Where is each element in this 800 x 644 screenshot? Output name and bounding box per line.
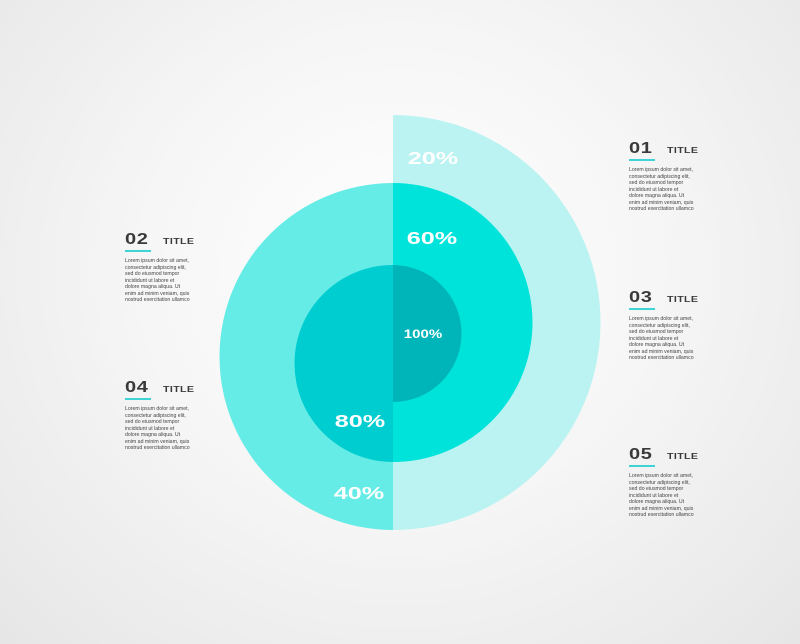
segment: 40% left: 40%: [334, 483, 384, 503]
text block 01: [629, 140, 698, 212]
text block 04: consectetur adipiscing elit,: [125, 412, 186, 418]
text block 03: enim ad minim veniam, quis: [629, 348, 693, 354]
text block 05: sed do eiusmod tempor: [629, 486, 683, 492]
text block 03: [629, 289, 698, 361]
text block 05: [629, 446, 698, 518]
text block 05: Lorem ipsum dolor sit amet,: [629, 473, 693, 479]
segment: 20% right outer: 20%: [408, 148, 458, 168]
segment: 60% right: [393, 183, 532, 462]
text block 01: TITLE: [667, 145, 698, 155]
text block 01: enim ad minim veniam, quis: [629, 200, 693, 206]
text block 01: nostrud exercitation ullamco: [629, 206, 694, 212]
text block 05: incididunt ut labore et: [629, 492, 678, 498]
segment: 100% right: 100%: [404, 327, 442, 341]
text block 03: Lorem ipsum dolor sit amet,: [629, 316, 693, 322]
text block 03: sed do eiusmod tempor: [629, 329, 683, 335]
segment: 100% right: [393, 265, 461, 402]
text block 04: [125, 379, 194, 451]
text block 03: nostrud exercitation ullamco: [629, 355, 694, 361]
segment: 80% left: 80%: [335, 411, 385, 431]
text block 02: 02: [125, 231, 148, 248]
text block 02: dolore magna aliqua. Ut: [125, 284, 180, 290]
text block 02: enim ad minim veniam, quis: [125, 290, 189, 296]
text block 01: incididunt ut labore et: [629, 186, 678, 192]
text block 02: incididunt ut labore et: [125, 278, 174, 284]
text block 05: enim ad minim veniam, quis: [629, 506, 693, 512]
text block 03: incididunt ut labore et: [629, 336, 678, 342]
segment: 20% right outer: [393, 115, 600, 530]
text block 05: 05: [629, 446, 652, 463]
text block 02: sed do eiusmod tempor: [125, 271, 179, 277]
text block 02: [125, 231, 194, 303]
text block 02: consectetur adipiscing elit,: [125, 264, 186, 270]
text block 02: TITLE: [163, 236, 194, 246]
text block 01: sed do eiusmod tempor: [629, 180, 683, 186]
text block 02: Lorem ipsum dolor sit amet,: [125, 258, 189, 264]
text block 04: sed do eiusmod tempor: [125, 419, 179, 425]
text block 03: dolore magna aliqua. Ut: [629, 342, 684, 348]
text block 02: nostrud exercitation ullamco: [125, 297, 190, 303]
segment: 40% left: [219, 183, 393, 530]
text block 01: consectetur adipiscing elit,: [629, 174, 690, 180]
text block 01: 01: [629, 140, 652, 157]
text block 04: enim ad minim veniam, quis: [125, 438, 189, 444]
text block 04: nostrud exercitation ullamco: [125, 445, 190, 451]
text block 01: dolore magna aliqua. Ut: [629, 193, 684, 199]
text block 03: 03: [629, 289, 652, 306]
text block 05: dolore magna aliqua. Ut: [629, 499, 684, 505]
text block 05: nostrud exercitation ullamco: [629, 512, 694, 518]
text block 03: consectetur adipiscing elit,: [629, 322, 690, 328]
segment: 80% left: [294, 265, 393, 462]
text block 04: Lorem ipsum dolor sit amet,: [125, 406, 189, 412]
text block 05: consectetur adipiscing elit,: [629, 480, 690, 486]
text block 03: TITLE: [667, 294, 698, 304]
text block 01: Lorem ipsum dolor sit amet,: [629, 167, 693, 173]
text block 04: incididunt ut labore et: [125, 426, 174, 432]
text block 04: 04: [125, 379, 148, 396]
segment: 60% right: 60%: [407, 228, 457, 248]
text block 04: TITLE: [163, 384, 194, 394]
text block 05: TITLE: [667, 451, 698, 461]
text block 04: dolore magna aliqua. Ut: [125, 432, 180, 438]
